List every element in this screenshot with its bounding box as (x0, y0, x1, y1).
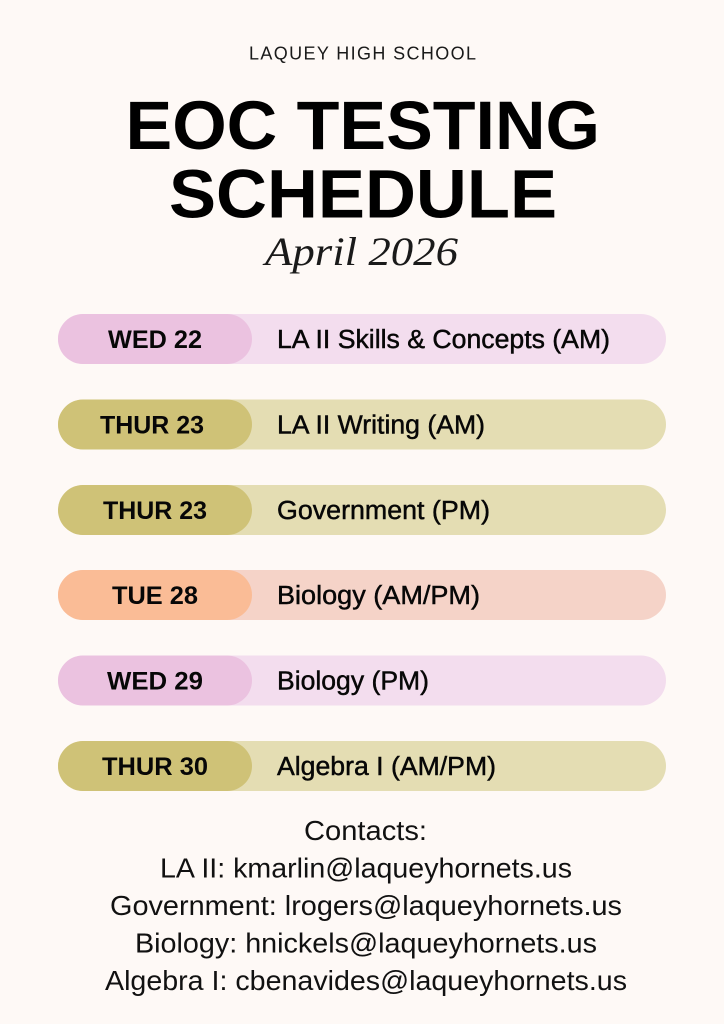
contacts: Government: lrogers@laqueyhornets.us (110, 890, 622, 921)
schedule row: Tue 28: Biology (AM/PM) (277, 582, 480, 610)
schedule row: Thur 30: Algebra I (AM/PM) (277, 753, 496, 781)
title: EOC TESTING (126, 87, 600, 164)
schedule row: Tue 28: TUE 28 (112, 582, 198, 610)
schedule row: Wed 29 (58, 656, 666, 706)
schedule row: Thur 23 writing (58, 400, 666, 450)
schedule row: Thur 30 (58, 741, 666, 791)
schedule row: Wed 22: LA II Skills & Concepts (AM) (277, 326, 610, 354)
schedule row: Thur 23 government: THUR 23 (103, 497, 207, 525)
schedule row: Thur 23 writing: THUR 23 (100, 412, 204, 440)
contacts: Contacts: (304, 815, 427, 846)
schedule row: Wed 29: Biology (PM) (277, 668, 429, 696)
school name: LAQUEY HIGH SCHOOL (249, 44, 476, 64)
schedule row: Thur 23 writing: LA II Writing (AM) (277, 412, 485, 440)
contacts: Algebra I: cbenavides@laqueyhornets.us (105, 965, 627, 996)
contacts (105, 815, 627, 996)
contacts: LA II: kmarlin@laqueyhornets.us (160, 852, 572, 884)
schedule row: Thur 23 government: Government (PM) (277, 497, 490, 525)
schedule row: Wed 22 (58, 314, 666, 364)
schedule row: Thur 23 government (58, 485, 666, 535)
schedule row: Thur 30: THUR 30 (102, 753, 208, 781)
contacts: Biology: hnickels@laqueyhornets.us (135, 928, 597, 958)
schedule row: Wed 22: WED 22 (108, 326, 202, 354)
schedule row: Tue 28 (58, 570, 666, 620)
schedule row: Wed 29: WED 29 (107, 668, 203, 696)
title: SCHEDULE (169, 156, 557, 232)
subtitle: date: April 2026 (262, 229, 458, 274)
title (126, 87, 600, 232)
